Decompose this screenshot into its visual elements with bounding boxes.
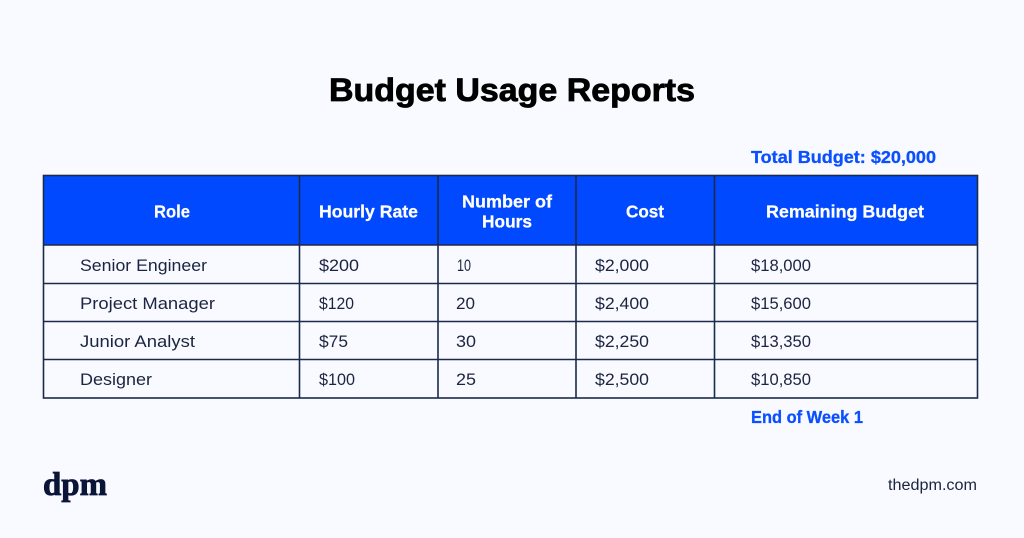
table header row: Hourly Rate — [319, 202, 418, 222]
table header row: Number of — [462, 192, 552, 212]
row: Junior Analyst: Junior Analyst — [80, 332, 195, 351]
row: Senior Engineer: Senior Engineer — [80, 256, 207, 275]
row: Junior Analyst: $13,350 — [751, 332, 811, 351]
row: Project Manager — [80, 294, 811, 313]
title: Budget Usage Reports — [329, 72, 695, 108]
row: Designer: Designer — [80, 370, 152, 389]
table header row — [44, 176, 978, 245]
budget table — [44, 176, 978, 398]
row: Junior Analyst — [80, 332, 811, 351]
row: Designer: $100 — [319, 370, 355, 389]
row: Project Manager: 20 — [456, 294, 475, 313]
row: Senior Engineer — [80, 256, 811, 275]
table header row: Remaining Budget — [766, 202, 924, 222]
row: Junior Analyst: $2,250 — [595, 332, 649, 351]
end of week label: End of Week 1 — [751, 407, 863, 427]
table header row: Role — [154, 202, 190, 222]
row: Project Manager: $120 — [319, 294, 354, 313]
row: Designer — [80, 370, 811, 389]
row: Designer: 25 — [456, 370, 476, 389]
row: Senior Engineer: $18,000 — [751, 256, 811, 275]
website url: thedpm.com — [888, 477, 977, 494]
row: Designer: $2,500 — [595, 370, 649, 389]
logo: dpm: dpm — [43, 467, 107, 503]
row: Project Manager: Project Manager — [80, 294, 215, 313]
row: Senior Engineer: 10 — [457, 256, 471, 275]
table grid lines — [44, 176, 978, 398]
row: Junior Analyst: 30 — [456, 332, 476, 351]
row: Senior Engineer: $200 — [319, 256, 359, 275]
table header row: Cost — [626, 202, 664, 222]
row: Project Manager: $2,400 — [595, 294, 649, 313]
table header row: Hours — [482, 212, 532, 232]
row: Junior Analyst: $75 — [319, 332, 348, 351]
total budget label: Total Budget: $20,000 — [751, 147, 936, 167]
row: Senior Engineer: $2,000 — [595, 256, 649, 275]
row: Project Manager: $15,600 — [751, 294, 811, 313]
row: Designer: $10,850 — [751, 370, 811, 389]
